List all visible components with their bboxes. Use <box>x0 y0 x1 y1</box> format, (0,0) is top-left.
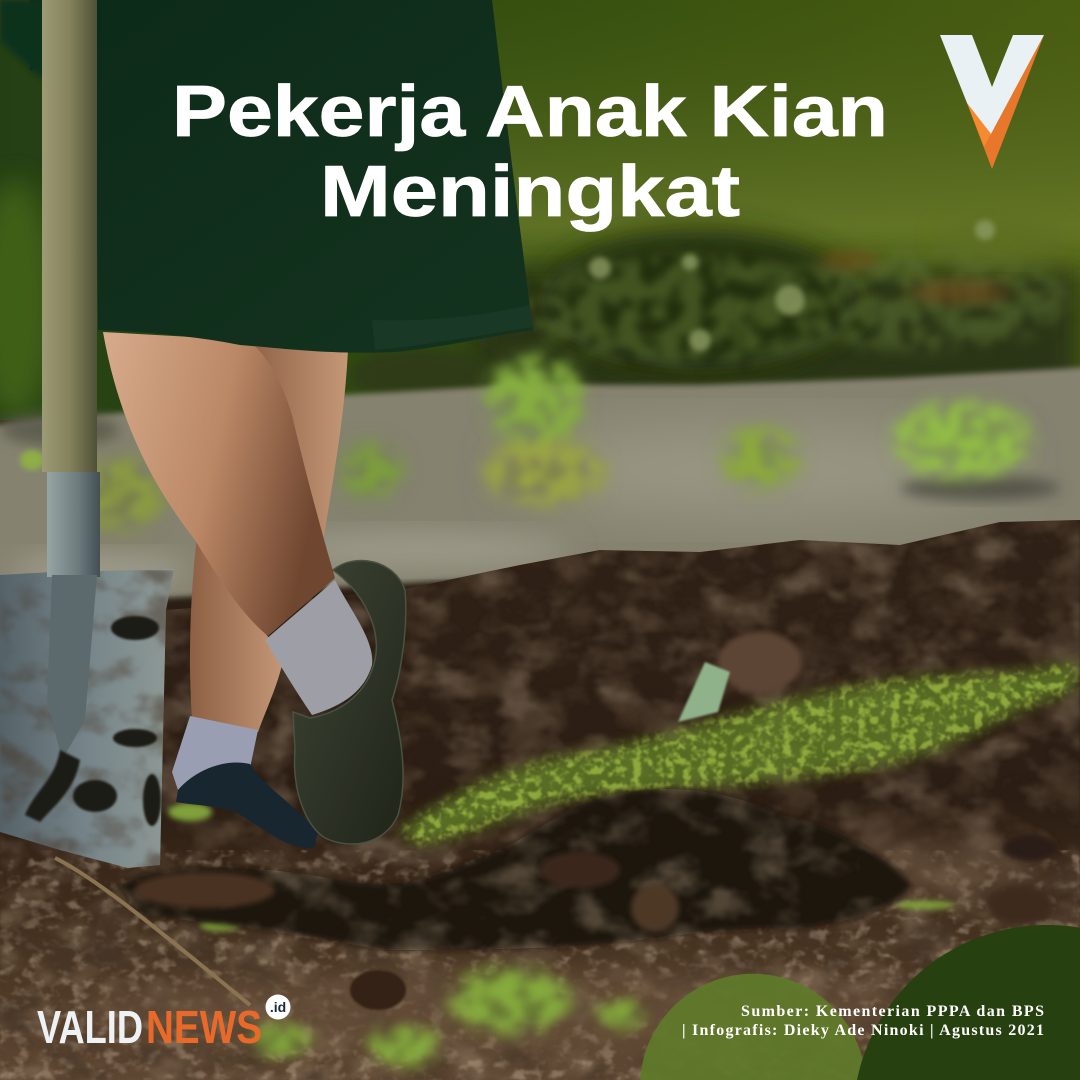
decorative circle: olive <box>640 974 866 1080</box>
shovel blade <box>0 472 175 870</box>
skirt hem highlight <box>372 305 533 350</box>
background: blurred green field <box>0 0 1080 420</box>
skirt top-left shade <box>0 0 96 78</box>
title <box>172 72 888 232</box>
back sock <box>172 716 258 790</box>
background: grass strip <box>168 660 1075 1066</box>
background: dark soil mound <box>55 780 1058 1010</box>
background: tilled soil <box>0 520 1080 1080</box>
back shoe <box>176 762 318 848</box>
decorative circle: dark green <box>857 925 1080 1080</box>
background: seedlings on path <box>20 356 1032 531</box>
title line 2: Meningkat <box>320 152 740 232</box>
skirt <box>30 0 533 353</box>
background: grey mulched path <box>0 366 1080 610</box>
title line 1: Pekerja Anak Kian <box>172 72 888 152</box>
source credit text <box>682 1003 1044 1039</box>
shovel <box>0 472 175 870</box>
source line 2: | Infografis: Dieky Ade Ninoki | Agustus 2021 <box>682 1022 1044 1039</box>
back leg <box>190 345 348 732</box>
source line 1: Sumber: Kementerian PPPA dan BPS <box>741 1003 1044 1020</box>
icon: V logo top right <box>940 35 1044 169</box>
front leg <box>103 332 335 636</box>
logo badge .id <box>266 994 290 1020</box>
person <box>0 0 533 848</box>
logo word NEWS: NEWS <box>146 1001 262 1053</box>
logo word VALID: VALID <box>37 1001 143 1053</box>
front shoe <box>293 560 406 844</box>
logo badge .id: .id <box>270 999 286 1015</box>
front sock <box>265 580 372 715</box>
shovel handle <box>42 0 97 472</box>
logo: Valid News <box>37 994 290 1053</box>
